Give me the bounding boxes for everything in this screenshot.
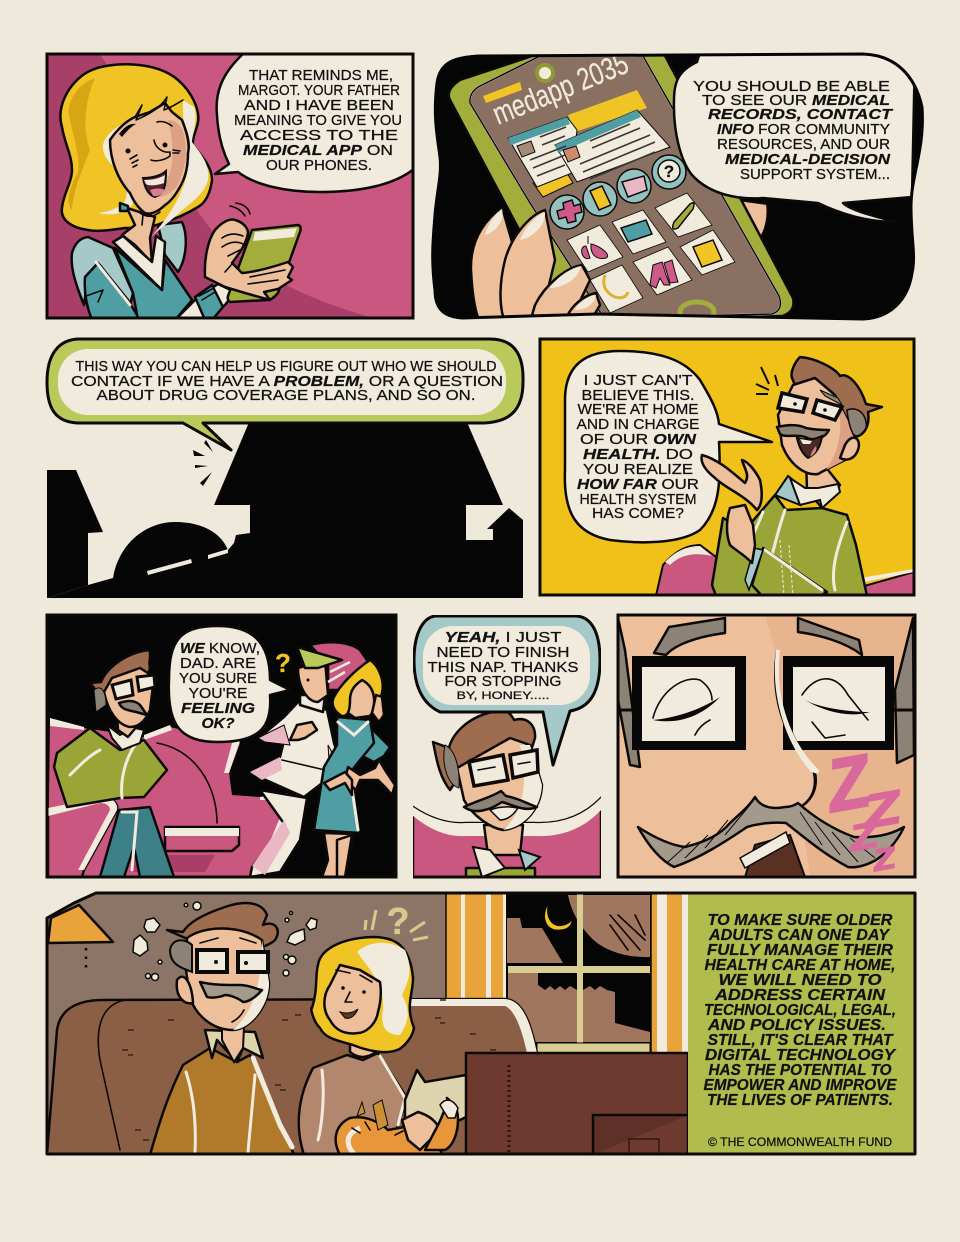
- speech bubble: I JUST CAN'T: [584, 372, 692, 389]
- speech bubble: DAD. ARE: [180, 655, 256, 672]
- caption box: HEALTH CARE AT HOME,: [704, 957, 896, 974]
- speech bubble: YEAH, I JUST: [444, 629, 562, 646]
- panel: phone close-up: [433, 45, 922, 322]
- caption box: HAS THE POTENTIAL TO: [708, 1062, 892, 1079]
- question mark burst: ?: [386, 901, 410, 943]
- speech bubble: ACCESS TO THE: [240, 127, 398, 144]
- sleep Zs: Z: [819, 738, 879, 828]
- closed eyes: [653, 679, 870, 738]
- speech bubble: [414, 616, 600, 765]
- speech bubble: ABOUT DRUG COVERAGE PLANS, AND SO ON.: [96, 387, 476, 404]
- speech bubble: [47, 339, 523, 450]
- caption box: EMPOWER AND IMPROVE: [704, 1077, 898, 1094]
- speech bubble: [169, 626, 290, 742]
- window: [505, 893, 652, 1053]
- sound lines: [193, 440, 213, 486]
- speech bubble: NEED TO FINISH: [436, 644, 570, 661]
- speech bubble: RECORDS, CONTACT: [708, 106, 894, 123]
- speech bubble: HEALTH SYSTEM: [580, 491, 696, 508]
- panel: mother with phone: [47, 52, 415, 320]
- sleep Zs: Z: [857, 780, 907, 838]
- record cards: [508, 90, 670, 197]
- panel: family in living room: [47, 615, 396, 877]
- curtains: [446, 893, 688, 1053]
- speech bubble: OF OUR OWN: [580, 431, 697, 448]
- caption box: © THE COMMONWEALTH FUND: [708, 1135, 892, 1149]
- speech bubble: YOU REALIZE: [583, 461, 693, 478]
- caption box: ADDRESS CERTAIN: [714, 987, 885, 1004]
- panel: house silhouette: [47, 339, 523, 598]
- speech bubble: YOU SURE: [179, 670, 257, 687]
- panel 8 border: [47, 893, 915, 1154]
- speech bubble: TO SEE OUR MEDICAL: [702, 92, 890, 109]
- figure: nurse: [250, 642, 369, 877]
- caption box: TO MAKE SURE OLDER: [708, 912, 893, 929]
- phone body: [449, 50, 794, 322]
- speech bubble: FEELING: [181, 700, 255, 717]
- speech bubble: MARGOT. YOUR FATHER: [238, 82, 400, 99]
- speech bubble: WE KNOW,: [180, 640, 260, 657]
- mouth: [745, 835, 805, 877]
- speech bubble: FOR STOPPING: [444, 673, 562, 690]
- couch: [656, 544, 912, 594]
- speech bubble: YOU'RE: [188, 685, 248, 702]
- speech bubble: HAS COME?: [592, 505, 684, 522]
- figure: father: [702, 357, 882, 596]
- speech bubble: WE'RE AT HOME: [578, 401, 698, 418]
- app title: medapp 2035: [488, 45, 633, 131]
- speech bubble: HEALTH. DO: [583, 446, 693, 463]
- help glyph: ?: [664, 162, 674, 181]
- app tiles: [567, 193, 735, 313]
- figure: daughter: [299, 937, 414, 1155]
- cloud corner: [48, 905, 113, 972]
- nose: [752, 650, 817, 813]
- cushion: [405, 1070, 470, 1130]
- speech bubble: BELIEVE THIS.: [582, 387, 694, 404]
- speech bubble: AND IN CHARGE: [576, 416, 700, 433]
- cat: [336, 1098, 458, 1155]
- monitor icon: [621, 220, 652, 242]
- phone in hand: [175, 203, 301, 320]
- caption box: TECHNOLOGICAL, LEGAL,: [704, 1002, 896, 1019]
- speech bubble: YOU SHOULD BE ABLE: [693, 78, 890, 95]
- speech bubble: [565, 351, 772, 542]
- pill icon: [673, 203, 694, 229]
- panel: father and daughter on couch: [47, 893, 688, 1155]
- speech bubble: OK?: [202, 715, 234, 732]
- hair and eyebrows: [618, 618, 914, 767]
- popcorn thought puffs: [133, 902, 317, 980]
- caption box: STILL, IT'S CLEAR THAT: [708, 1032, 894, 1049]
- caption box: [688, 893, 915, 1154]
- home button: [678, 300, 716, 315]
- sleep Zs: Z: [845, 813, 883, 859]
- camera ring: [537, 65, 553, 81]
- panel: father excited: [540, 339, 914, 600]
- clipboard icon: [693, 240, 722, 267]
- panel: father asks to nap: [413, 616, 601, 877]
- caption box: WE WILL NEED TO: [718, 972, 882, 989]
- speech bubble: THIS WAY YOU CAN HELP US FIGURE OUT WHO WE SHOULD: [76, 358, 497, 375]
- speech bubble: THAT REMINDS ME,: [249, 67, 393, 84]
- speech bubble: CONTACT IF WE HAVE A PROBLEM, OR A QUESTION: [71, 373, 503, 390]
- speech bubble: MEANING TO GIVE YOU: [234, 112, 402, 129]
- television back: [466, 1053, 688, 1155]
- panel 1 border: [47, 54, 413, 318]
- caption box: FULLY MANAGE THEIR: [707, 942, 893, 959]
- phone screen: [470, 56, 780, 318]
- panel 5 border: [47, 615, 396, 877]
- app circles: [550, 155, 686, 229]
- caption box: DIGITAL TECHNOLOGY: [705, 1047, 896, 1064]
- speech bubble: SUPPORT SYSTEM...: [740, 166, 890, 183]
- mustache: [638, 797, 904, 867]
- speech bubble: THIS NAP. THANKS: [428, 659, 578, 676]
- speech bubble: INFO FOR COMMUNITY: [717, 121, 890, 138]
- couch: [47, 999, 540, 1155]
- figure: father seated: [54, 650, 174, 877]
- lungs icon: [582, 236, 608, 259]
- figure: father: [150, 903, 294, 1155]
- fingers: [471, 207, 600, 322]
- stethoscope icon: [604, 275, 628, 298]
- caption box: ADULTS CAN ONE DAY: [708, 927, 890, 944]
- sleep Zs: [819, 738, 907, 878]
- speech bubble: AND I HAVE BEEN: [244, 97, 394, 114]
- house silhouettes: [47, 420, 523, 598]
- panel: sleeping close-up: [617, 615, 915, 878]
- question mark burst: [365, 901, 428, 943]
- glasses: [617, 656, 915, 750]
- sleep Zs: Z: [869, 841, 900, 878]
- speech bubble: OUR PHONES.: [266, 157, 372, 174]
- yellow tab: [483, 82, 522, 103]
- speech bubble: RESOURCES, AND OUR: [717, 136, 890, 153]
- couch: [48, 718, 292, 877]
- caption box: AND POLICY ISSUES.: [707, 1017, 886, 1034]
- question mark: ?: [275, 648, 291, 678]
- couch background: [413, 798, 601, 877]
- figure: daughter: [314, 660, 395, 877]
- speech bubble: MEDICAL-DECISION: [725, 151, 891, 168]
- speech bubble: BY, HONEY.....: [456, 690, 550, 702]
- speech bubble: HOW FAR OUR: [577, 476, 699, 493]
- hand behind phone: [744, 202, 766, 235]
- people icon: [650, 262, 670, 288]
- panel 4 border: [540, 339, 914, 595]
- figure: father: [433, 710, 542, 877]
- speech bubble: MEDICAL APP ON: [243, 142, 393, 159]
- speech bubble: [674, 52, 915, 222]
- panel 7 border: [618, 615, 915, 877]
- speech bubble: [215, 52, 415, 192]
- panel 6 border bottom: [413, 876, 601, 878]
- caption box: THE LIVES OF PATIENTS.: [707, 1092, 893, 1109]
- figure: mother: [60, 64, 212, 320]
